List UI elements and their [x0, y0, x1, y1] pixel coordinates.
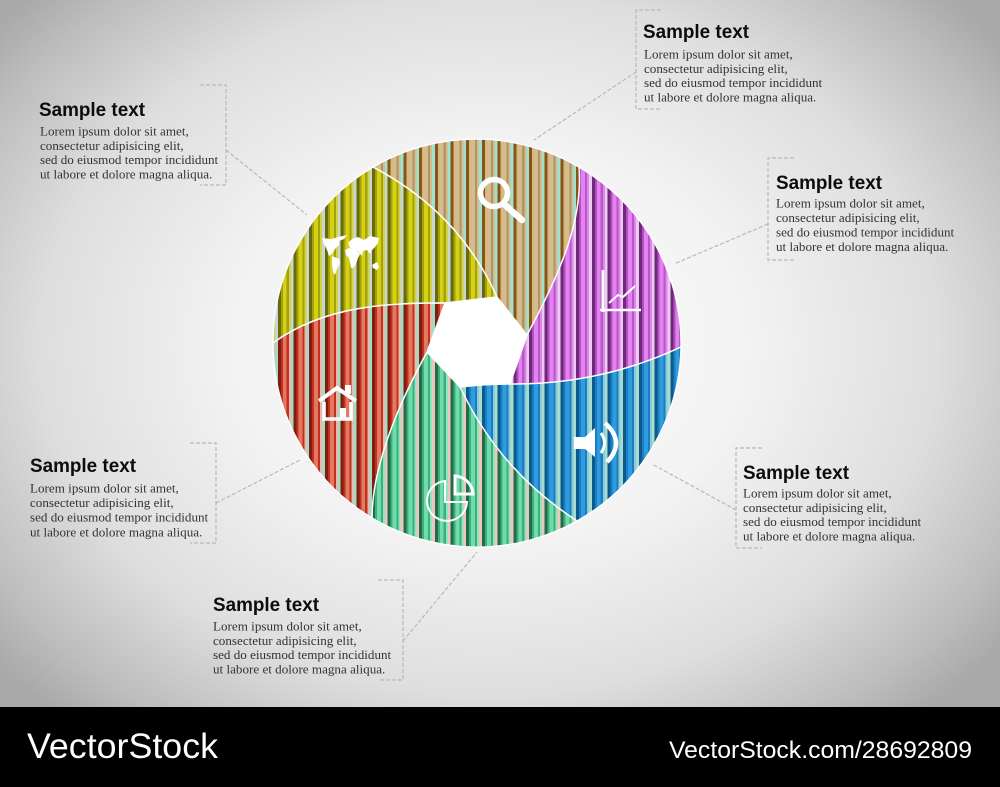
text block: ut labore et dolore magna aliqua. [40, 166, 212, 182]
center hexagon [427, 297, 527, 387]
icon: house [319, 385, 356, 419]
heading: Sample text [39, 100, 146, 121]
text block: ut labore et dolore magna aliqua. [644, 90, 816, 104]
callout: upper left [39, 85, 307, 215]
text block: sed do eiusmod tempor incididunt [644, 75, 823, 90]
heading: Sample text [643, 22, 750, 43]
text block: Lorem ipsum dolor sit amet, [743, 486, 892, 500]
panel: purple segment [510, 167, 681, 384]
text block: consectetur adipisicing elit, [776, 210, 920, 225]
text block: Lorem ipsum dolor sit amet, [644, 46, 793, 62]
text block: sed do eiusmod tempor incididunt [30, 510, 209, 524]
panel: red segment [273, 303, 445, 518]
heading: Sample text [213, 595, 320, 616]
text block: sed do eiusmod tempor incididunt [776, 224, 955, 240]
callout: lower left [30, 443, 300, 543]
panel: blue segment [460, 347, 681, 521]
icon: world map [322, 235, 379, 275]
text block: sed do eiusmod tempor incididunt [743, 514, 922, 529]
panel: tan segment [373, 139, 580, 335]
text block: Lorem ipsum dolor sit amet, [213, 618, 362, 634]
text block: consectetur adipisicing elit, [30, 495, 174, 510]
text block: ut labore et dolore magna aliqua. [743, 528, 915, 544]
callout: lower right [652, 448, 922, 548]
text block: Lorem ipsum dolor sit amet, [30, 480, 179, 496]
footer id: VectorStock.com/28692809 [669, 737, 972, 764]
text block: ut labore et dolore magna aliqua. [213, 662, 385, 676]
text block: consectetur adipisicing elit, [644, 61, 788, 76]
text block: consectetur adipisicing elit, [213, 633, 357, 648]
text block: Lorem ipsum dolor sit amet, [40, 124, 189, 138]
callout: top [534, 10, 823, 140]
icon: magnifier [480, 180, 522, 220]
heading: Sample text [743, 463, 850, 484]
icon: line chart [600, 270, 641, 312]
text block: Lorem ipsum dolor sit amet, [776, 196, 925, 210]
circle diagram [273, 139, 681, 547]
icon: pie chart [427, 476, 473, 521]
callout: bottom [213, 552, 477, 680]
text block: consectetur adipisicing elit, [40, 138, 184, 153]
text block: consectetur adipisicing elit, [743, 500, 887, 515]
text block: sed do eiusmod tempor incididunt [40, 152, 219, 167]
panel: yellow segment [273, 167, 497, 343]
text block: ut labore et dolore magna aliqua. [776, 239, 948, 254]
icon: speaker [574, 423, 616, 462]
callout: upper right [674, 158, 955, 264]
footer logo: VectorStock [27, 727, 219, 766]
text block: ut labore et dolore magna aliqua. [30, 524, 202, 540]
panel: green segment [372, 352, 577, 547]
footer bar [0, 707, 1000, 787]
heading: Sample text [30, 456, 137, 477]
heading: Sample text [776, 173, 883, 194]
text block: sed do eiusmod tempor incididunt [213, 647, 392, 662]
